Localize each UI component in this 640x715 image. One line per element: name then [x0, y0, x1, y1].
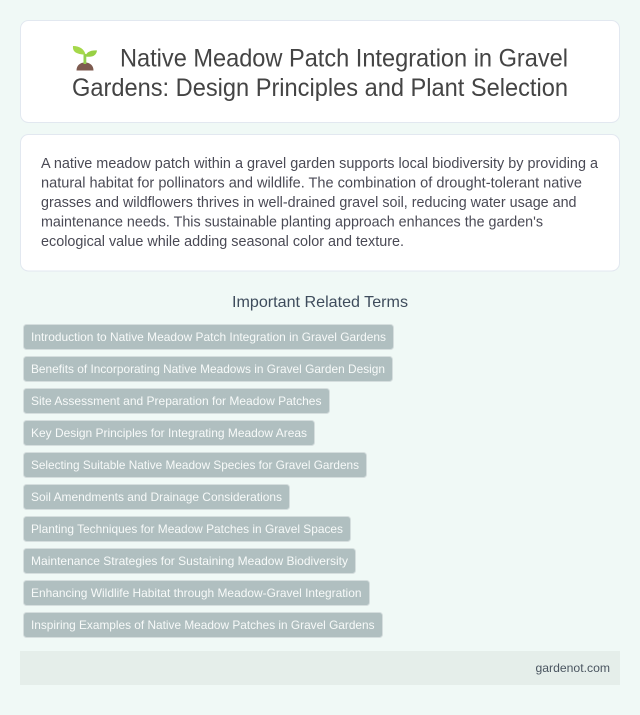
tag 4 — [24, 420, 314, 446]
tag 3 — [24, 388, 330, 414]
tag 5 — [24, 452, 366, 478]
tag 3: Site Assessment and Preparation for Meadow Patches — [31, 394, 322, 408]
panel: title card — [20, 20, 620, 122]
footer credit: gardenot.com — [536, 661, 610, 675]
summary text: maintenance needs. This sustainable planting approach enhances the garden's — [41, 214, 543, 230]
tag 6: Soil Amendments and Drainage Considerations — [31, 490, 282, 504]
panel: summary — [20, 134, 620, 271]
tag 1 — [24, 324, 394, 350]
title: Gardens: Design Principles and Plant Selection — [72, 74, 568, 102]
summary text — [41, 156, 598, 250]
tag 8 — [24, 548, 356, 574]
summary text: natural habitat for pollinators and wildlife. The combination of drought-tolerant native — [41, 176, 582, 192]
title — [72, 44, 568, 102]
tag 1: Introduction to Native Meadow Patch Integration in Gravel Gardens — [31, 330, 386, 344]
summary text: ecological value while adding seasonal color and texture. — [41, 234, 404, 250]
tag 4: Key Design Principles for Integrating Meadow Areas — [31, 426, 307, 440]
tag 8: Maintenance Strategies for Sustaining Meadow Biodiversity — [31, 554, 348, 568]
tag 9 — [24, 580, 370, 606]
icon: sprout — [73, 46, 97, 70]
tag 9: Enhancing Wildlife Habitat through Meadow-Gravel Integration — [31, 586, 362, 600]
tag 2 — [24, 356, 392, 382]
tag 10 — [24, 612, 382, 638]
footer — [20, 651, 620, 685]
tag 7 — [24, 516, 350, 542]
tag 6 — [24, 484, 290, 510]
tag 10: Inspiring Examples of Native Meadow Patches in Gravel Gardens — [31, 618, 374, 632]
tag 5: Selecting Suitable Native Meadow Species for Gravel Gardens — [31, 458, 359, 472]
tag 2: Benefits of Incorporating Native Meadows in Gravel Garden Design — [31, 362, 385, 376]
title: Native Meadow Patch Integration in Gravel — [120, 44, 568, 72]
heading: related terms: Important Related Terms — [232, 294, 408, 311]
summary text: A native meadow patch within a gravel garden supports local biodiversity by providing a — [41, 156, 598, 172]
summary text: grasses and wildflowers thrives in well-drained gravel soil, reducing water usage and — [41, 195, 576, 211]
list: related term tags — [24, 324, 394, 638]
tag 7: Planting Techniques for Meadow Patches in Gravel Spaces — [31, 522, 343, 536]
